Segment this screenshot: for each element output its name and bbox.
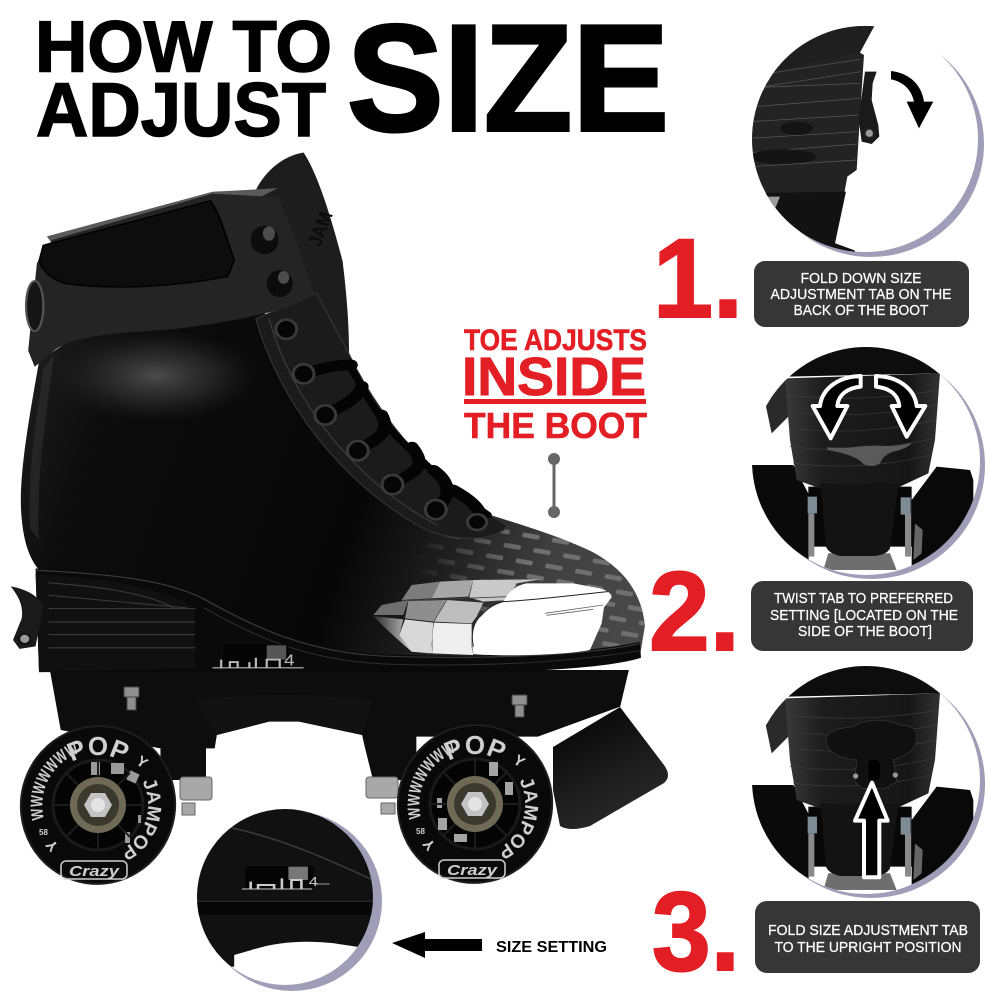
size window: [213, 644, 304, 670]
arrow: fold down: [891, 71, 933, 128]
axle nuts: [180, 777, 398, 815]
rear wheel: Crazy: [69, 863, 120, 880]
panel: step 2 photo: [747, 340, 985, 579]
mounting bolts: [124, 687, 527, 717]
toe pattern: [428, 529, 645, 654]
eyelets: [276, 320, 487, 530]
front wheel: JAMPOP: [502, 779, 538, 858]
label: size setting: SIZE SETTING: [496, 939, 607, 956]
step number 1: 1.: [653, 216, 743, 341]
callout: toe adjusts inside the boot: [462, 324, 647, 446]
shell edge highlight: [29, 354, 54, 540]
front wheel: Crazy: [447, 862, 498, 879]
knit lining trim: [47, 188, 278, 244]
title: how to adjust: [35, 8, 332, 153]
laces: [304, 365, 488, 522]
heel block: [36, 574, 195, 672]
front wheel: POP: [444, 736, 506, 760]
collar badge: [26, 281, 43, 331]
lace panel: [256, 294, 507, 538]
rear wheel: WWWWWWW: [30, 744, 78, 821]
rear wheel: Y: [43, 836, 62, 855]
panel: size setting close-up: 4: [309, 876, 318, 889]
label: step 1: BACK OF THE BOOT: [794, 302, 928, 319]
rear wheel: 58: [39, 828, 48, 837]
icon: fold-down tab: [858, 72, 879, 144]
label: step 1: [754, 261, 969, 327]
arrow: fold up: [855, 783, 888, 877]
label: step 2: [751, 581, 973, 651]
label: step 1: FOLD DOWN SIZE: [800, 270, 922, 287]
toe stop: [553, 707, 668, 829]
rear wheel: POP: [66, 736, 128, 761]
title: how to adjust: ADJUST: [36, 68, 326, 153]
label: step 2: SETTING [LOCATED ON THE: [770, 607, 958, 624]
folding tab: [11, 586, 43, 649]
knit mesh panel: [39, 201, 234, 287]
skate plate: [50, 670, 629, 780]
panel: step 1 photo: [752, 26, 984, 257]
connector line: [548, 453, 560, 518]
front wheel: Y: [420, 835, 439, 854]
panel: size setting close-up: [197, 809, 382, 991]
speed hooks: [251, 226, 293, 297]
step number 3: 3.: [652, 869, 740, 994]
shell highlight: [52, 329, 260, 422]
padded collar band: [28, 194, 314, 367]
callout: toe adjusts inside the boot: THE BOOT: [464, 405, 647, 446]
front wheel: WWWWWWW: [408, 743, 454, 820]
label: step 2: SIDE OF THE BOOT]: [798, 623, 932, 640]
toe adjustment illustration: [373, 579, 612, 655]
arrows: twist directions: [813, 376, 925, 438]
label: step 3: TO THE UPRIGHT POSITION: [774, 939, 962, 956]
step number 2: 2.: [649, 549, 740, 674]
front wheel: [396, 724, 554, 884]
arrow: pointing to size setting: [392, 932, 482, 958]
size window: 4: [284, 651, 295, 669]
label: step 2: TWIST TAB TO PREFERRED: [774, 590, 953, 607]
rear wheel: [20, 725, 176, 885]
label: step 3: FOLD SIZE ADJUSTMENT TAB: [768, 922, 968, 939]
front wheel: 58: [416, 827, 425, 836]
sole: [36, 569, 641, 672]
boot shell: [21, 311, 645, 669]
front wheel: Y: [510, 752, 528, 771]
label: step 3: [755, 901, 980, 973]
icon: upright tab: [826, 720, 917, 788]
panel: step 3 photo: [747, 660, 985, 898]
callout: toe adjusts inside the boot: INSIDE: [462, 347, 646, 407]
rear wheel: Y: [133, 753, 151, 772]
tongue brand text: JAM: [302, 209, 337, 248]
boot: [11, 152, 651, 672]
icon: twist tab: [827, 443, 912, 466]
rear collar tongue: [256, 152, 349, 361]
label: step 1: ADJUSTMENT TAB ON THE: [770, 286, 952, 303]
title: how to adjust: HOW TO: [35, 8, 332, 88]
callout: toe adjusts inside the boot: TOE ADJUSTS: [464, 324, 647, 357]
rear wheel: JAMPOP: [124, 780, 162, 860]
roller skate: [10, 152, 668, 885]
